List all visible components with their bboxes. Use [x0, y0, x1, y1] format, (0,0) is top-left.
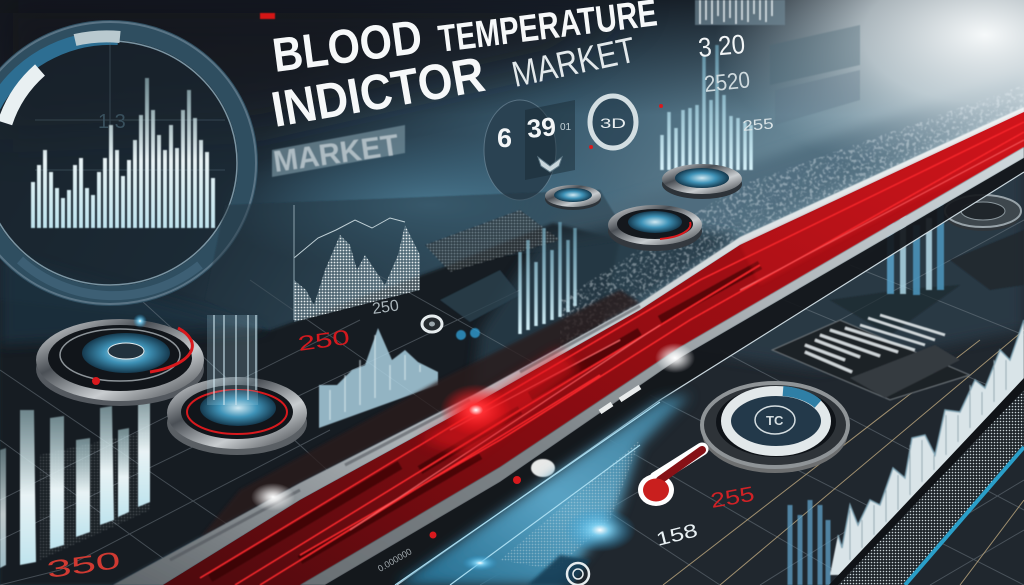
panel: readouts centre: 39 — [525, 111, 557, 144]
disc: large left — [36, 314, 204, 406]
chart: right blue bars — [887, 204, 944, 295]
panel: readouts centre: 6 — [497, 123, 512, 153]
panel: dark strip beside lower rail — [325, 158, 1024, 585]
flare: blue lower — [564, 508, 636, 552]
panel: mid dashboards — [205, 135, 1024, 340]
icon: small target — [422, 316, 442, 332]
disc: far right — [945, 195, 1021, 231]
title — [267, 0, 659, 138]
icon: readout ring: 3D — [600, 115, 626, 131]
disc: large gauge: TC — [766, 413, 784, 428]
chart: lower-right rising area — [790, 320, 1024, 585]
flare: white left — [251, 483, 295, 511]
readout: grey 350: 250 — [371, 297, 400, 318]
band: red data stream — [163, 112, 1024, 585]
panel: dark strip beside lower rail: 0.000000 — [376, 546, 414, 574]
panel: dark red tinted strip above rail — [200, 290, 640, 538]
readouts: upper right numbers — [697, 29, 774, 135]
chart: ring gauge with bars: 1 3 — [98, 111, 126, 133]
disc: centre — [608, 205, 702, 251]
panel: upper right data screens — [695, 0, 860, 125]
chart: mid area chart — [294, 205, 420, 322]
panel: dotted data band — [829, 378, 1024, 585]
flare: white centre — [655, 343, 695, 373]
panel: readouts centre — [484, 100, 575, 200]
disc: large gauge — [702, 383, 848, 473]
disc: small upper — [545, 185, 601, 210]
icon: thermometer — [638, 449, 702, 506]
chart: lower-left bars — [0, 384, 150, 568]
accent: cyan line — [905, 447, 1024, 585]
red indicator — [260, 13, 275, 19]
panel: blurred market label: MARKET — [271, 129, 401, 179]
readouts: upper right numbers: 255 — [742, 115, 774, 135]
readouts: upper right numbers: 3 20 — [697, 29, 746, 63]
flare: blue small — [462, 555, 498, 571]
readout: red 250: 250 — [296, 326, 351, 356]
chart: lower mountain chart — [319, 328, 438, 428]
band: upper silver rail — [113, 107, 1024, 585]
readout: white 158: 158 — [654, 520, 700, 551]
readout: red 350: 350 — [45, 547, 122, 584]
chart: ring gauge with bars — [0, 22, 256, 304]
title: MARKET — [508, 29, 639, 95]
title: INDICTOR — [267, 46, 489, 138]
perspective grid lines — [0, 200, 1024, 585]
flare: red centre — [440, 384, 512, 436]
chart: upper holographic bars — [659, 45, 751, 170]
icon: readout ring — [589, 96, 636, 149]
panel: readouts centre: 01 — [560, 122, 572, 133]
band: blue stream — [395, 395, 690, 585]
chart bars — [33, 78, 213, 228]
band: lower silver rail — [300, 147, 1024, 585]
readout: red 255: 255 — [709, 483, 756, 513]
icon: bottom target — [567, 563, 589, 585]
disc: upper right of centre — [662, 164, 742, 199]
chart: mid blue bars — [520, 222, 575, 334]
texture: speckled fog field — [560, 85, 1024, 350]
panel: stripe list — [772, 315, 970, 400]
title: BLOOD — [270, 11, 425, 83]
disc: second left with hologram — [167, 315, 307, 455]
readouts: upper right numbers: 2520 — [703, 66, 751, 97]
